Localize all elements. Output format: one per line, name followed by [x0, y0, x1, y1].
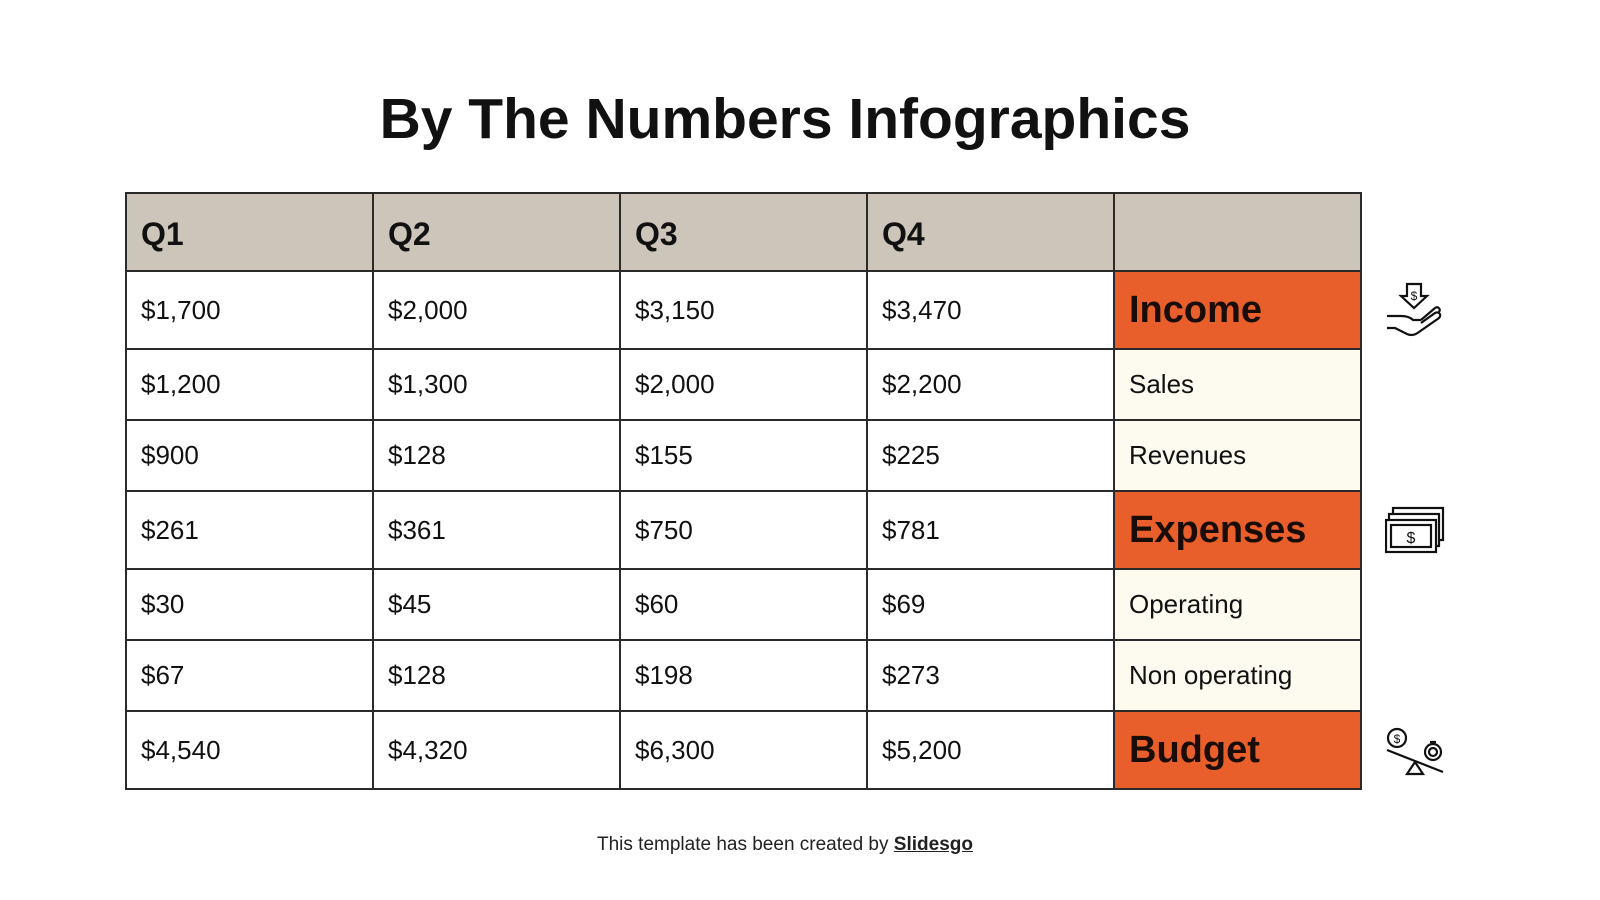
table: $3,470	[882, 294, 962, 324]
table: $60	[635, 589, 678, 619]
table	[125, 192, 1362, 790]
table: $1,700	[141, 294, 221, 324]
table: $750	[635, 514, 693, 544]
table: $4,320	[388, 734, 468, 764]
table: $4,540	[141, 734, 221, 764]
table: Revenues	[1129, 440, 1246, 470]
table: $361	[388, 514, 446, 544]
table: Operating	[1129, 589, 1243, 619]
icon: cash stack	[1385, 506, 1444, 554]
table: Income	[1129, 288, 1262, 330]
table: $67	[141, 660, 184, 690]
table: Q2	[388, 216, 431, 252]
table: $900	[141, 440, 199, 470]
table: $45	[388, 589, 431, 619]
table: $198	[635, 660, 693, 690]
table: $128	[388, 440, 446, 470]
table: $2,200	[882, 369, 962, 399]
icon: cash stack: $	[1407, 530, 1416, 547]
title: By The Numbers Infographics	[380, 87, 1190, 151]
table: $5,200	[882, 734, 962, 764]
icon: hand with dollar: $	[1411, 289, 1418, 303]
icon: balance scale: $	[1394, 732, 1401, 746]
table: $1,300	[388, 369, 468, 399]
table: $225	[882, 440, 940, 470]
table: $1,200	[141, 369, 221, 399]
table: Q3	[635, 216, 678, 252]
table: $2,000	[388, 294, 468, 324]
table: $155	[635, 440, 693, 470]
table: $2,000	[635, 369, 715, 399]
table: $128	[388, 660, 446, 690]
table: Sales	[1129, 369, 1194, 399]
table: $30	[141, 589, 184, 619]
table: $69	[882, 589, 925, 619]
table: Non operating	[1129, 660, 1292, 690]
table: Q4	[882, 216, 925, 252]
icon: balance scale	[1386, 728, 1444, 776]
table: $781	[882, 514, 940, 544]
icon: hand with dollar	[1387, 282, 1442, 336]
table: Expenses	[1129, 508, 1306, 550]
table: $261	[141, 514, 199, 544]
table: $273	[882, 660, 940, 690]
table: Budget	[1129, 728, 1260, 770]
footer: This template has been created by Slidesgo	[597, 834, 973, 855]
table: $3,150	[635, 294, 715, 324]
table: $6,300	[635, 734, 715, 764]
table: Q1	[141, 216, 184, 252]
